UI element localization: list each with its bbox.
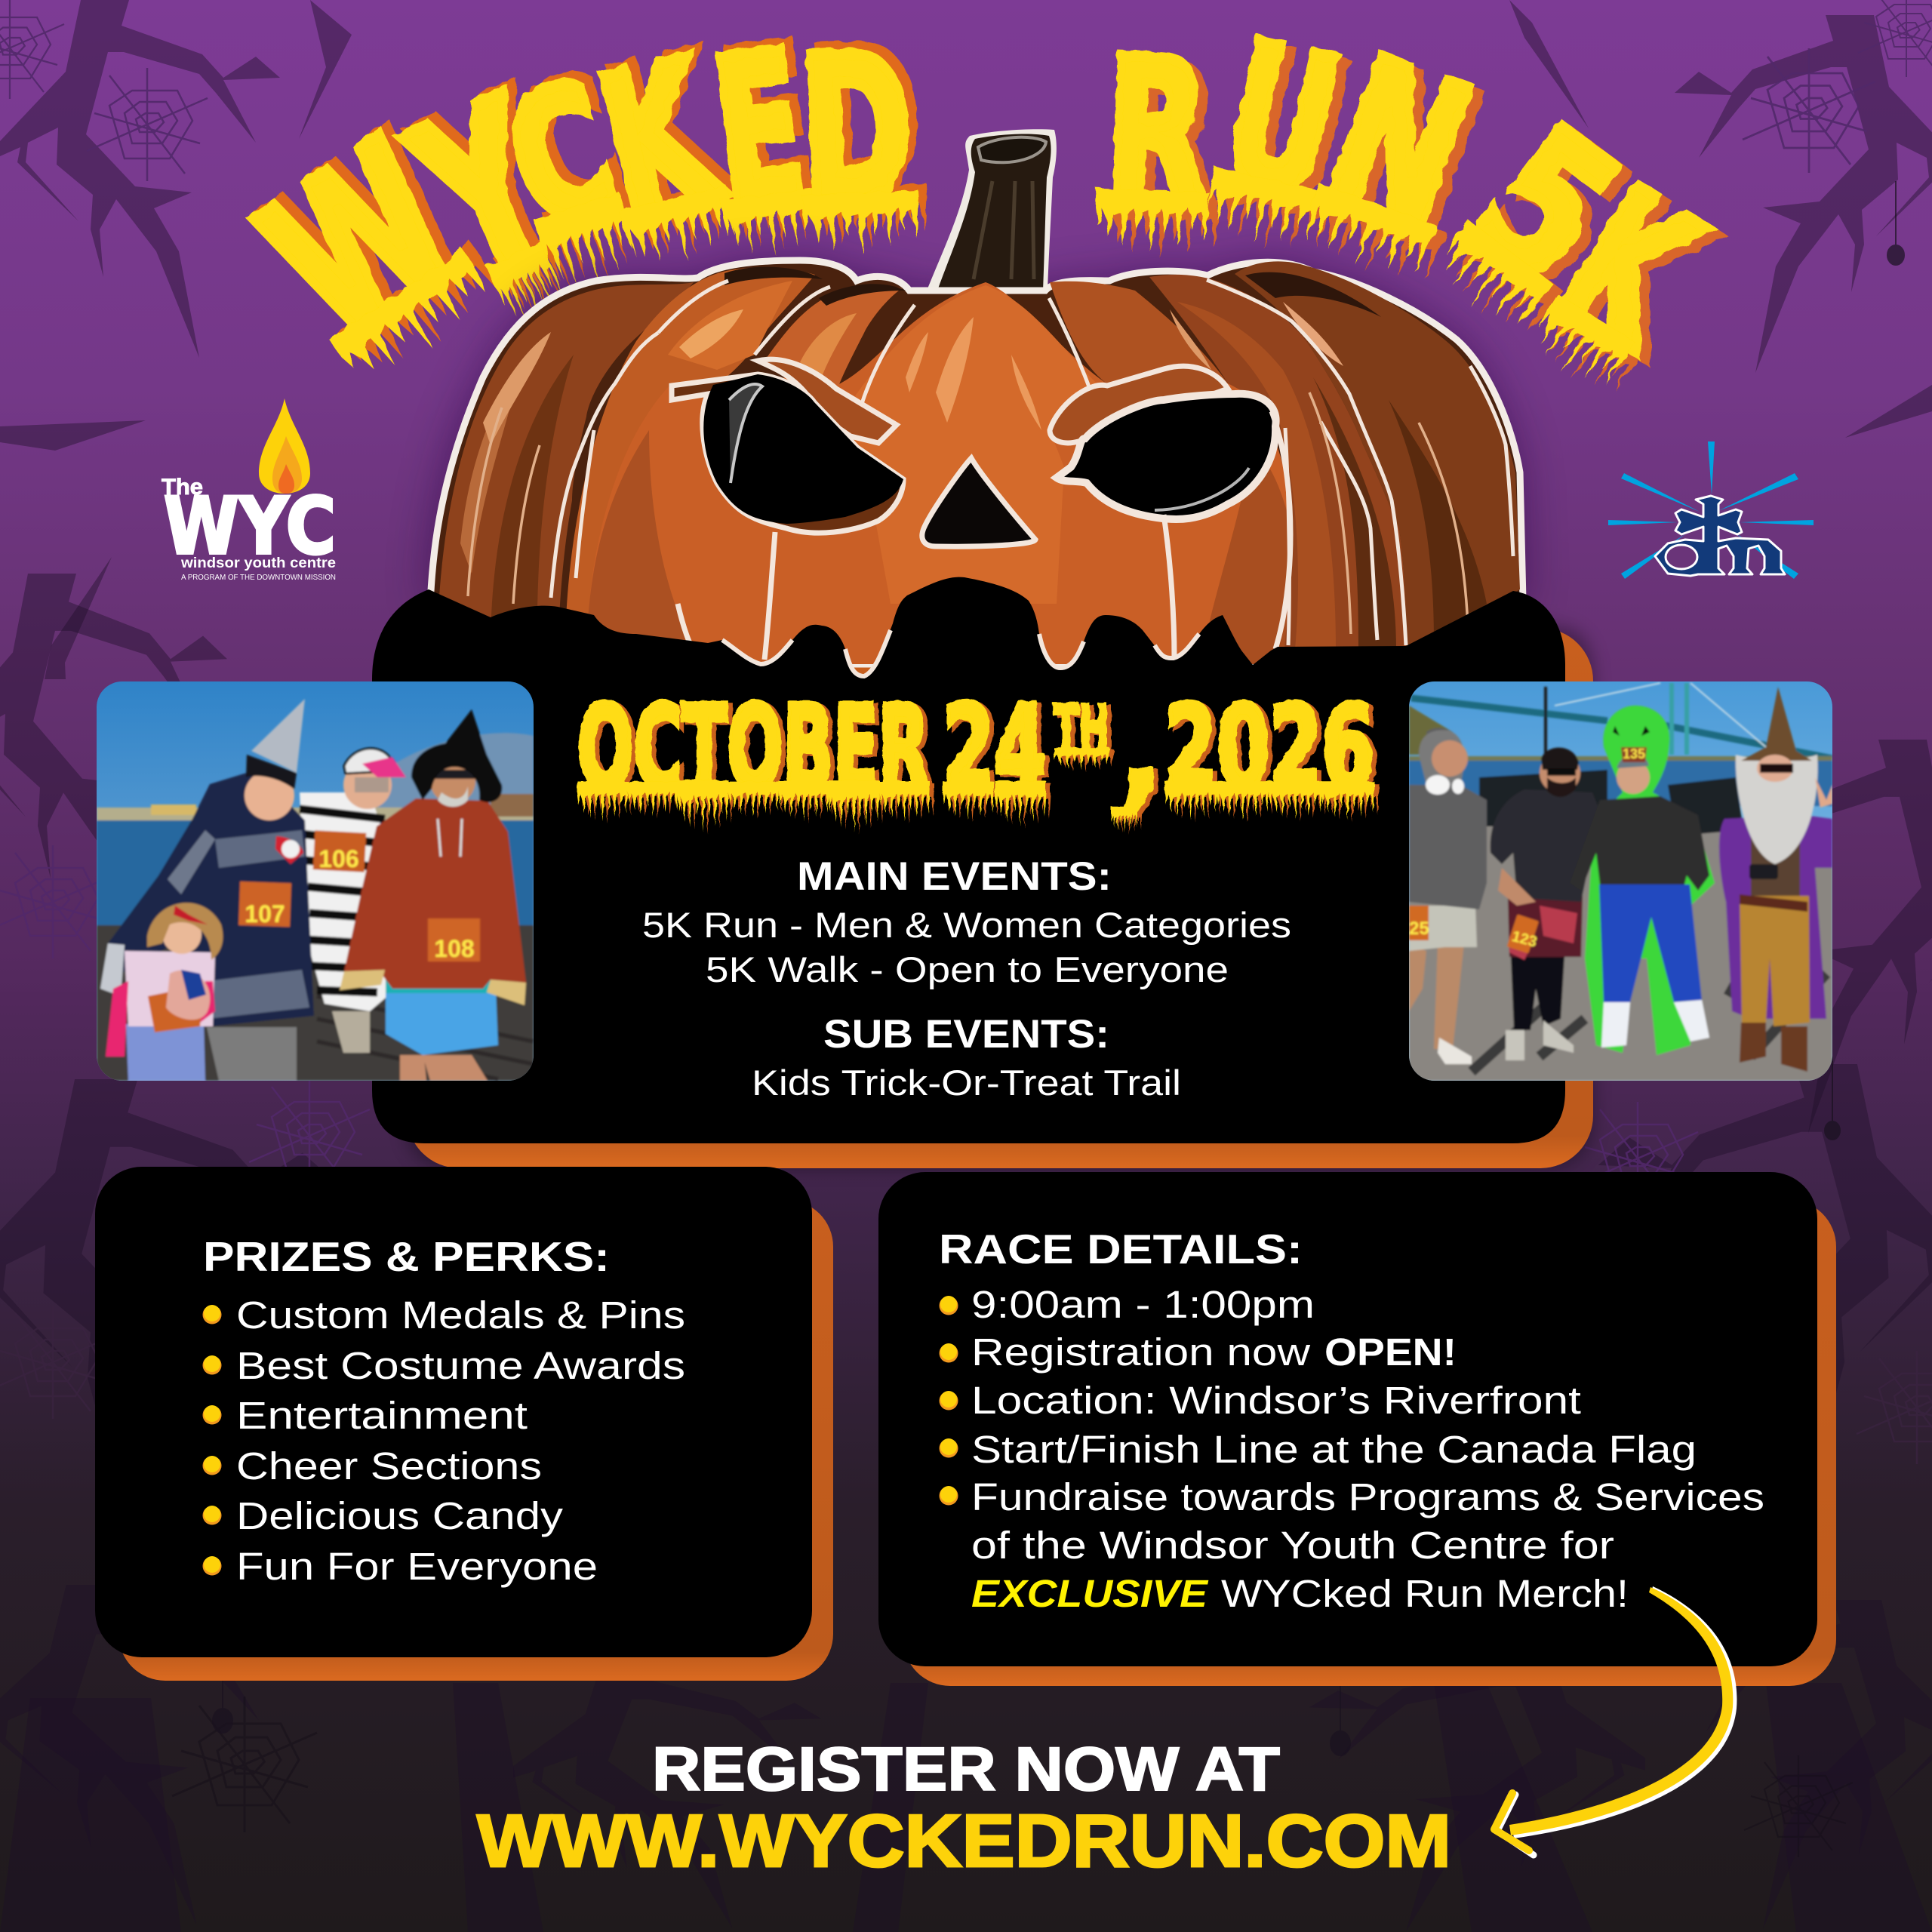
logo: Windsor Youth Centre	[162, 398, 336, 582]
second left rib	[565, 267, 823, 649]
left eye	[672, 359, 903, 533]
bridge	[1410, 681, 1832, 758]
pavement	[1409, 823, 1832, 1081]
race detail list: EXCLUSIVE	[971, 1572, 1209, 1615]
TH superscript	[1054, 692, 1109, 770]
woman in silver jacket	[100, 699, 314, 1081]
bib 107	[238, 881, 291, 928]
heading: PRIZES & PERKS:	[203, 1233, 610, 1280]
panel: main events	[372, 129, 1593, 1168]
person in grey hoodie: 25	[1409, 918, 1429, 939]
bullet markers	[939, 1296, 958, 1505]
pumpkin glow	[429, 260, 1524, 604]
orange offset backing	[118, 1200, 833, 1681]
prize list: Custom Medals & Pins	[236, 1294, 685, 1337]
person in inflatable alien costume	[1570, 706, 1715, 1055]
prize list: Fun For Everyone	[236, 1545, 598, 1588]
bullet markers	[202, 1305, 222, 1576]
stem	[927, 129, 1057, 291]
race detail list: of the Windsor Youth Centre for	[971, 1524, 1614, 1567]
prize list	[236, 1294, 685, 1588]
logo text: A PROGRAM OF THE DOWNTOWN MISSION	[181, 574, 336, 582]
logo text: The	[162, 475, 203, 500]
pumpkin	[429, 129, 1524, 664]
24	[943, 681, 1046, 826]
prize list: Best Costume Awards	[236, 1344, 685, 1387]
melting drip lines	[678, 411, 1291, 660]
October: OCTOBER	[577, 681, 929, 814]
call to action: REGISTER NOW AT	[652, 1735, 1280, 1804]
bib 108: 108	[434, 935, 475, 962]
bib 107: 107	[245, 900, 285, 928]
logo text: WYC	[164, 481, 336, 572]
bib 106	[313, 830, 366, 872]
orange offset backing	[407, 628, 1593, 1168]
wizard	[1719, 687, 1832, 1072]
person in inflatable alien costume: 135	[1623, 746, 1645, 761]
2026: 2026	[1164, 681, 1374, 814]
arrow	[1494, 1586, 1737, 1855]
24: 24	[943, 681, 1046, 814]
clouds	[377, 733, 534, 808]
title: Run 5K	[1094, 2, 1732, 397]
arrow yellow shaft	[1509, 1587, 1733, 1835]
letter C: C	[487, 45, 635, 267]
heading: RACE DETAILS:	[939, 1226, 1303, 1272]
letter Y: Y	[383, 52, 589, 332]
spiders	[213, 181, 1904, 1755]
comma: ,	[1117, 674, 1166, 823]
panel: race details	[878, 1172, 1836, 1686]
main events text: 5K Run - Men & Women Categories	[642, 905, 1291, 945]
letter K: K	[1527, 146, 1732, 392]
cross and dm mark	[1655, 496, 1785, 576]
call to action	[477, 1735, 1451, 1882]
prize list: Cheer Sections	[236, 1444, 542, 1487]
race detail list: OPEN!	[1324, 1331, 1457, 1374]
race detail list: Registration now	[971, 1331, 1310, 1374]
prize list: Delicious Candy	[236, 1494, 564, 1537]
pumpkin body	[429, 260, 1524, 664]
October	[577, 681, 930, 832]
nose	[922, 458, 1035, 546]
pavement shadows	[1472, 943, 1826, 1072]
orange offset backing	[903, 1200, 1836, 1686]
letter K: K	[582, 17, 737, 263]
race detail list: 9:00am - 1:00pm	[971, 1283, 1315, 1326]
right ribs	[1050, 261, 1520, 649]
letter D: D	[795, 9, 918, 251]
prize list: Entertainment	[236, 1394, 528, 1437]
photo: costumed runners by the bridge	[1409, 681, 1832, 1081]
man in red hoodie	[340, 709, 526, 1081]
face shading	[586, 430, 709, 664]
black card	[95, 1167, 812, 1657]
TH superscript: TH	[1054, 692, 1109, 766]
face	[586, 282, 1300, 664]
light rays	[1608, 441, 1814, 579]
boy in stripes	[298, 746, 407, 1055]
sub events text	[752, 1012, 1181, 1103]
person in black shirt: 123	[1510, 928, 1539, 951]
bib 106: 106	[318, 845, 359, 872]
third left rib	[764, 284, 906, 392]
race detail list: WYCked Run Merch!	[1221, 1572, 1629, 1615]
race detail list: Fundraise towards Programs & Services	[971, 1475, 1764, 1518]
bib 108	[428, 918, 480, 962]
right eye	[1050, 366, 1276, 519]
race detail list: Start/Finish Line at the Canada Flag	[971, 1428, 1697, 1471]
date	[577, 674, 1374, 832]
arrow white edge	[1512, 1586, 1737, 1838]
flame icon	[259, 398, 310, 494]
main events text: 5K Walk - Open to Everyone	[706, 949, 1229, 989]
melted drip outlines	[722, 630, 1199, 676]
title: Wycked	[228, 8, 921, 393]
photo: costumed family on the riverfront	[97, 681, 534, 1081]
call to action: WWW.WYCKEDRUN.COM	[477, 1799, 1451, 1882]
letter E: E	[703, 8, 816, 255]
race detail list	[971, 1283, 1764, 1615]
logo text: windsor youth centre	[180, 555, 336, 571]
panel shadow	[407, 626, 1593, 1168]
2026	[1164, 681, 1374, 820]
main events text	[642, 854, 1291, 989]
race detail list: Location: Windsor’s Riverfront	[971, 1379, 1581, 1422]
letter U: U	[1205, 2, 1357, 243]
sub events text: SUB EVENTS:	[823, 1012, 1109, 1057]
arrow head	[1494, 1793, 1534, 1855]
black panel with melted top edge	[372, 577, 1565, 1143]
river	[1409, 756, 1832, 762]
rib cream strokes	[551, 280, 1513, 645]
letter R: R	[1103, 17, 1211, 245]
digit 5: 5	[1435, 85, 1654, 329]
panel: prizes and perks	[95, 1167, 833, 1681]
parked cars	[1479, 770, 1743, 834]
outer left rib	[437, 282, 694, 649]
letter N: N	[1301, 14, 1497, 278]
person in grey hoodie	[1409, 728, 1487, 1064]
letter W: W	[228, 100, 494, 386]
boardwalk	[97, 925, 534, 1081]
logo: Downtown Mission	[1608, 441, 1814, 579]
sub events text: Kids Trick-Or-Treat Trail	[752, 1063, 1181, 1103]
water and far shore	[97, 820, 534, 930]
black card	[878, 1172, 1817, 1666]
tree	[1409, 706, 1453, 755]
person in black shirt	[1491, 748, 1600, 1060]
girl in gingham dress	[106, 903, 223, 1081]
main events text: MAIN EVENTS:	[797, 854, 1112, 899]
